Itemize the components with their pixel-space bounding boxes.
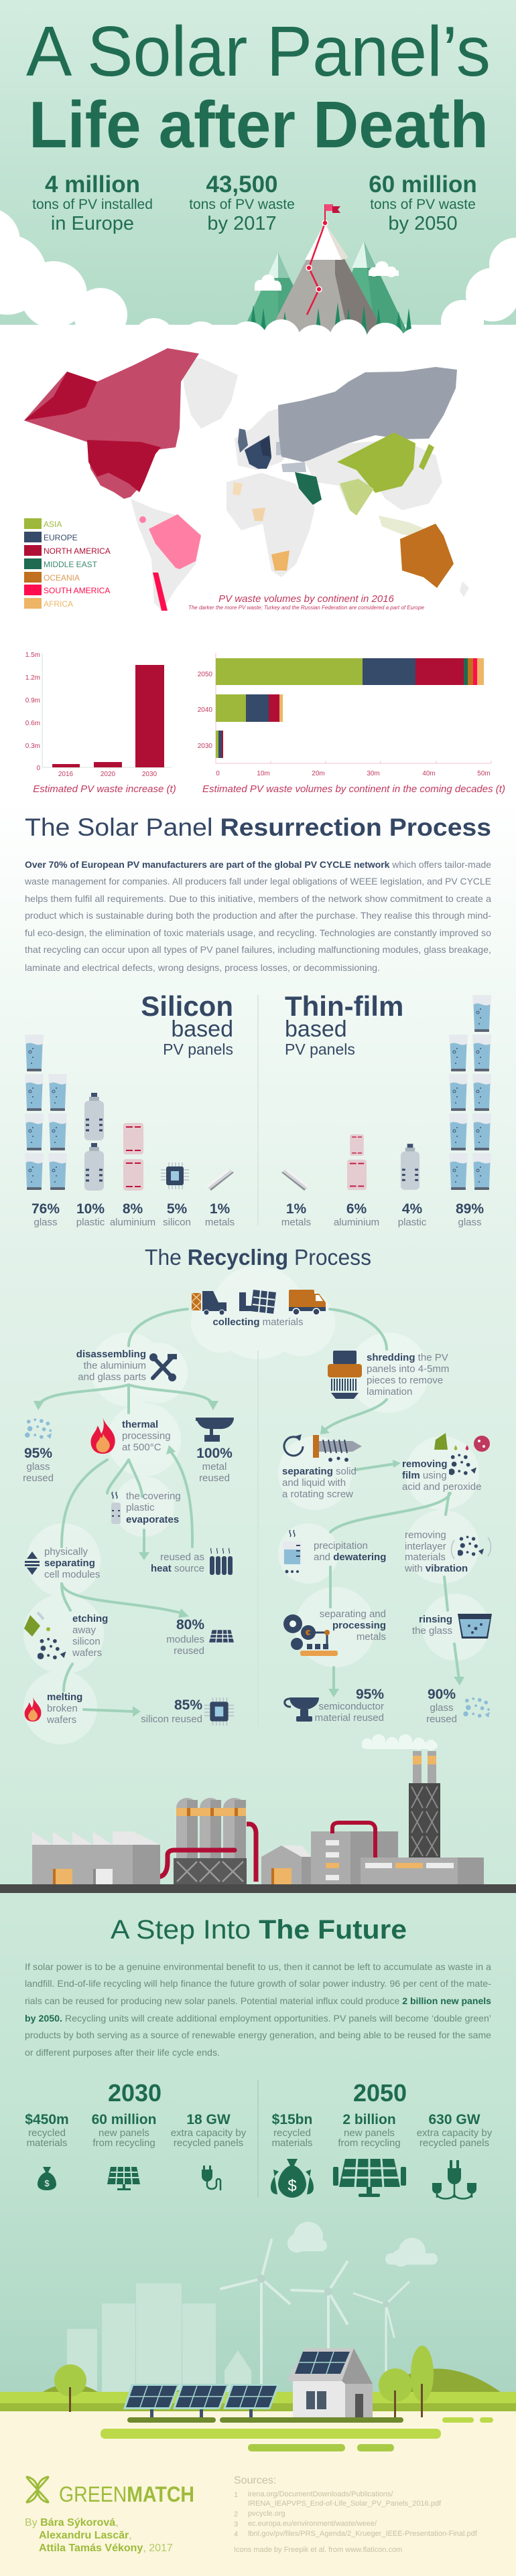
heading: silicon based PV panels: based	[171, 1016, 233, 1042]
future stats 2030	[25, 2112, 247, 2149]
material percentages: 1%	[286, 1201, 306, 1217]
icons 2050	[271, 2159, 476, 2199]
paragraph: PV CYCLE: helps them fulfil all requirements. Due to this initiative, members of the network show commitment to create a	[25, 893, 491, 904]
step: removing interlayer materials: with vibration	[404, 1563, 468, 1574]
step: separating solid and liquid: a rotating screw	[282, 1489, 353, 1500]
bar chart: estimated PV waste increase: 0.6m	[25, 720, 40, 727]
step: plastic evaporates: the covering	[126, 1491, 181, 1502]
bar chart: estimated PV waste increase	[25, 652, 176, 795]
future stats 2050: materials	[272, 2137, 312, 2149]
illustration: factory	[0, 1734, 516, 1893]
map caption	[188, 593, 425, 611]
silicon material icons	[25, 1035, 234, 1191]
paragraph: PV CYCLE: laminate and electrical defects, wrong designs, process losses, or decommissioning.	[25, 962, 380, 973]
future stats 2050: 630 GW	[428, 2112, 480, 2127]
result: 95% semiconductor material reused: material reused	[315, 1712, 384, 1724]
stacked bar chart: waste by continent: 0	[216, 770, 220, 777]
heading: resurrection process: The Solar Panel Resurrection Process	[25, 814, 491, 841]
step: physically separating	[25, 1546, 100, 1580]
heading: thin-film based PV panels: PV panels	[285, 1041, 355, 1058]
sources: 4	[234, 2530, 238, 2539]
stacked bar chart: waste by continent: 50m	[477, 770, 491, 777]
stat: 60 million: tons of PV waste	[370, 197, 476, 212]
future stats 2030: recycled panels	[174, 2137, 243, 2149]
stacked bar chart: waste by continent: 10m	[257, 770, 270, 777]
result: 80% modules reused: 80%	[176, 1617, 204, 1633]
result: 100% metal reused: 100%	[196, 1446, 233, 1461]
material percentages: metals	[281, 1217, 311, 1228]
map legend	[24, 518, 111, 609]
stacked bar chart: waste by continent: Estimated PV waste volumes by continent in the coming decades (t)	[202, 783, 505, 795]
result: 95% glass reused	[23, 1418, 54, 1484]
step: collecting materials: collecting materials	[212, 1316, 304, 1328]
stat: 4 million: in Europe	[51, 213, 134, 234]
stat: 4 million: 4 million	[45, 171, 140, 198]
result: reused as heat source: heat source	[151, 1563, 204, 1574]
future stats 2050: recycled	[273, 2127, 311, 2139]
stat: 43,500: 43,500	[206, 171, 278, 198]
paragraph: PV CYCLE: ful eco-design, the elimination of toxic materials usage, and recycling. Technologies are constantly improved so	[25, 927, 491, 938]
result: 100% metal reused: metal	[202, 1461, 227, 1472]
result: 90% glass reused	[426, 1687, 490, 1725]
result: 90% glass reused: glass	[430, 1702, 454, 1714]
step: precipitation and dewatering: precipitation	[314, 1540, 368, 1551]
year 2050 heading: 2050	[353, 2079, 407, 2107]
future stats 2030: 18 GW	[186, 2112, 231, 2127]
step: plastic evaporates: evaporates	[126, 1514, 179, 1525]
authors: Attila Tamás Vékony, 2017	[39, 2543, 173, 2554]
step: separating and processing metals: separating and	[320, 1608, 386, 1620]
step: collecting materials	[192, 1290, 326, 1328]
map caption: PV waste volumes by continent in 2016	[218, 593, 395, 605]
material percentages: plastic	[398, 1217, 427, 1228]
authors: By Bára Sýkorová,	[25, 2517, 119, 2528]
step: melting broken wafers: melting	[47, 1691, 82, 1703]
bar chart: estimated PV waste increase: 1.5m	[25, 652, 40, 659]
map legend: NORTH AMERICA	[44, 546, 111, 556]
material percentages: plastic	[76, 1217, 105, 1228]
step: separating and processing metals	[283, 1608, 386, 1656]
material percentages: aluminium	[110, 1217, 155, 1228]
stacked bar chart: waste by continent: 2030	[198, 743, 212, 750]
bar chart: estimated PV waste increase: 1.2m	[25, 674, 40, 682]
stat: 60 million: 60 million	[369, 171, 477, 198]
heading: thin-film based PV panels	[285, 990, 403, 1058]
year 2030 heading: 2030	[108, 2079, 162, 2107]
paragraph: future: or different purposes after their life cycle ends.	[25, 2047, 220, 2058]
step: melting broken wafers	[25, 1691, 82, 1726]
step: physically separating: physically	[44, 1546, 88, 1558]
step: precipitation and dewatering	[283, 1530, 386, 1574]
sources: Sources:	[234, 2475, 276, 2486]
future stats 2030: new panels	[99, 2127, 149, 2139]
result: 90% glass reused: reused	[426, 1714, 457, 1725]
step: thermal processing: processing	[122, 1430, 171, 1442]
title: A Solar Panel’s	[26, 12, 491, 91]
map legend: SOUTH AMERICA	[44, 586, 110, 595]
result: 95% semiconductor material reused: 95%	[356, 1687, 384, 1702]
step: shredding: panels into 4-5mm	[367, 1363, 449, 1375]
heading: thin-film based PV panels: based	[285, 1016, 347, 1042]
process arrows and connectors	[39, 1309, 459, 1712]
bar chart: estimated PV waste increase: 2030	[142, 771, 157, 778]
stat: 60 million: by 2050	[388, 213, 458, 234]
paragraph: future: landfill. End-of-life recycling will help finance the future growth of solar power industry. 96 per cent of the mate-	[25, 1978, 491, 1989]
sources: 1	[234, 2491, 238, 2499]
result: 80% modules reused	[166, 1617, 234, 1657]
future stats 2030: $450m	[25, 2112, 69, 2127]
icons 2030	[38, 2166, 220, 2190]
sources: lbnl.gov/pv/files/PRS_Agenda/2_Krueger_IEEE-Presentation-Final.pdf	[248, 2530, 478, 2538]
result: 100% metal reused	[196, 1418, 234, 1484]
result: 95% semiconductor material reused	[285, 1687, 384, 1724]
result: reused as heat source: reused as	[160, 1551, 204, 1563]
world map	[24, 348, 469, 611]
future stats 2050	[272, 2112, 493, 2149]
step: removing interlayer materials: removing	[405, 1529, 446, 1541]
paragraph: future: products by both serving as a source of renewable energy generation, and being able to be reused for the same	[25, 2030, 491, 2040]
header background	[0, 0, 516, 343]
step: separating and processing metals: metals	[357, 1631, 386, 1643]
future stats 2050: recycled panels	[420, 2137, 489, 2149]
sources: ec.europa.eu/environment/waste/weee/	[248, 2520, 377, 2528]
future stats 2030: materials	[27, 2137, 67, 2149]
step: rinsing the glass: rinsing	[419, 1614, 452, 1625]
step: shredding: pieces to remove	[367, 1375, 443, 1386]
step: removing interlayer materials: interlayer	[405, 1541, 446, 1552]
material percentages: 6%	[346, 1201, 367, 1217]
sources	[234, 2475, 478, 2554]
step: plastic evaporates: plastic	[126, 1502, 155, 1513]
result: 95% glass reused: glass	[26, 1461, 50, 1472]
step: removing film	[402, 1433, 490, 1493]
future stats 2030: extra capacity by	[171, 2127, 247, 2139]
map legend: OCEANIA	[44, 573, 80, 583]
bar chart: estimated PV waste increase: 2016	[58, 771, 74, 778]
step: etching: away	[72, 1624, 96, 1636]
step: rinsing the glass: the glass	[412, 1625, 452, 1637]
material percentages	[31, 1201, 484, 1228]
sources: 3	[234, 2520, 238, 2528]
step: thermal processing: at 500°C	[122, 1442, 162, 1453]
bar chart: estimated PV waste increase: 2020	[101, 771, 116, 778]
future stats 2030: recycled	[28, 2127, 66, 2139]
future stats 2030: 60 million	[92, 2112, 156, 2127]
result: 80% modules reused: reused	[174, 1645, 204, 1657]
sources: Icons made by Freepik et al. from www.flaticon.com	[234, 2546, 402, 2554]
stacked bar chart: waste by continent	[198, 653, 505, 795]
heading: the recycling process: The Recycling Process	[145, 1245, 371, 1270]
step: physically separating: separating	[44, 1558, 95, 1569]
sources: pvcycle.org	[248, 2510, 285, 2518]
logo: greenmatch: GREENMATCH	[59, 2482, 194, 2506]
step: separating solid and liquid: and liquid with	[282, 1477, 346, 1489]
step: disassembling: disassembling	[76, 1349, 146, 1360]
paragraph: future	[25, 1961, 491, 2058]
stat: 4 million	[32, 171, 153, 234]
step: removing film: acid and peroxide	[402, 1481, 481, 1493]
material percentages: 89%	[456, 1201, 484, 1217]
material percentages: glass	[458, 1217, 482, 1228]
step: separating solid and liquid: separating solid	[282, 1466, 357, 1477]
stat: 43,500: tons of PV waste	[189, 197, 295, 212]
future stats 2050: 2 billion	[342, 2112, 396, 2127]
material percentages: silicon	[163, 1217, 191, 1228]
heading: thin-film based PV panels: Thin-film	[285, 990, 403, 1022]
material percentages: 4%	[402, 1201, 422, 1217]
result: 85% silicon reused: 85%	[174, 1697, 202, 1713]
stacked bar chart: waste by continent: 30m	[367, 770, 380, 777]
result: 95% glass reused: 95%	[24, 1446, 52, 1461]
material percentages: glass	[34, 1217, 58, 1228]
material percentages: aluminium	[334, 1217, 379, 1228]
material percentages: 8%	[123, 1201, 143, 1217]
step: removing interlayer materials	[404, 1529, 491, 1574]
material percentages: 10%	[76, 1201, 105, 1217]
future stats 2050: from recycling	[338, 2137, 401, 2149]
icons 2050: $	[287, 2177, 297, 2195]
step: separating solid and liquid	[282, 1434, 362, 1500]
result: reused as heat source	[151, 1548, 233, 1575]
paragraph: PV CYCLE: waste management for companies. All producers fall under legal obligations of WEEE legislation, and PV CYCLE	[24, 876, 491, 887]
material percentages: 5%	[167, 1201, 187, 1217]
authors: Alexandru Lascăr,	[39, 2530, 132, 2541]
result: 85% silicon reused: silicon reused	[141, 1714, 202, 1725]
stat: 60 million	[369, 171, 477, 234]
map caption: The darker the more PV waste; Turkey and the Russian Federation are considered a part of Europe	[188, 605, 425, 611]
map legend: ASIA	[44, 520, 62, 529]
step: plastic evaporates	[111, 1491, 181, 1525]
stacked bar chart: waste by continent: 20m	[312, 770, 325, 777]
authors	[25, 2517, 173, 2554]
title: Life after Death	[29, 88, 489, 161]
step: etching: silicon	[72, 1636, 101, 1647]
bar chart: estimated PV waste increase: 0.9m	[25, 697, 40, 704]
paragraph: PV CYCLE	[24, 859, 491, 973]
map legend: EUROPE	[44, 533, 78, 542]
step: thermal processing	[91, 1418, 171, 1454]
paragraph: PV CYCLE: product which is sustainable during both the production and after the purchase. They realise this through mind-	[25, 910, 491, 921]
step: removing film: removing	[402, 1458, 448, 1470]
step: etching: etching	[72, 1613, 108, 1624]
step: shredding: shredding the PV	[367, 1352, 448, 1363]
logo: greenmatch	[27, 2477, 194, 2506]
stacked bar chart: waste by continent: 2040	[198, 706, 212, 714]
illustration: mountains with flag	[134, 204, 432, 365]
stat: 43,500: by 2017	[207, 213, 277, 234]
stat: 4 million: tons of PV installed	[32, 197, 153, 212]
background clouds for process	[23, 1266, 489, 1744]
future stats 2030: from recycling	[92, 2137, 155, 2149]
material percentages: 76%	[31, 1201, 60, 1217]
step: precipitation and dewatering: and dewatering	[314, 1551, 386, 1563]
material percentages: metals	[205, 1217, 235, 1228]
map legend: MIDDLE EAST	[44, 560, 98, 569]
material percentages: 1%	[210, 1201, 230, 1217]
stacked bar chart: waste by continent: 40m	[422, 770, 436, 777]
step: melting broken wafers: wafers	[46, 1714, 76, 1726]
step: thermal processing: thermal	[122, 1419, 158, 1430]
bar chart: estimated PV waste increase: 0.3m	[25, 743, 40, 750]
title	[26, 12, 491, 161]
sources: IRENA_IEAPVPS_End-of-Life_Solar_PV_Panels_2016.pdf	[248, 2500, 442, 2508]
step: disassembling	[76, 1349, 177, 1383]
future stats 2050: $15bn	[272, 2112, 312, 2127]
result: 90% glass reused: 90%	[428, 1687, 456, 1702]
future stats 2050: new panels	[344, 2127, 395, 2139]
step: separating and processing metals: processing	[332, 1620, 386, 1631]
step: melting broken wafers: broken	[47, 1703, 78, 1714]
step: disassembling: and glass parts	[78, 1371, 146, 1383]
sources: irena.org/DocumentDownloads/Publications/	[248, 2490, 393, 2498]
paragraph: PV CYCLE: Over 70% of European PV manufacturers are part of the global PV CYCLE network which offers tailor-made	[25, 859, 491, 870]
step: shredding	[328, 1351, 449, 1399]
result: 100% metal reused: reused	[199, 1472, 230, 1484]
illustration: landscape with solar panels and house	[0, 2346, 516, 2451]
step: removing interlayer materials: materials	[405, 1551, 446, 1563]
result: 95% glass reused: reused	[23, 1472, 54, 1484]
paragraph: PV CYCLE: that recycling can occur upon all types of PV panel failures, including malfunctioning modules, glass breakage,	[25, 944, 491, 955]
future stats 2050: extra capacity by	[417, 2127, 493, 2139]
step: shredding: lamination	[367, 1386, 412, 1397]
heading: silicon based PV panels: Silicon	[141, 990, 233, 1022]
icons 2030: $	[44, 2178, 50, 2188]
paragraph: future: If solar power is to be a genuine environmental benefit to us, then it cannot be left to accumulate as waste in a	[25, 1961, 491, 1972]
heading: silicon based PV panels	[141, 990, 233, 1058]
sources: 2	[234, 2510, 238, 2518]
result: 80% modules reused: modules	[166, 1634, 204, 1645]
step: disassembling: the aluminium	[84, 1360, 146, 1371]
step: rinsing the glass	[412, 1614, 492, 1639]
paragraph: future: rials can be reused for producing new solar panels. Potential material influx could produce 2 billion new panels	[25, 1995, 491, 2006]
step: etching	[24, 1612, 108, 1659]
heading: silicon based PV panels: PV panels	[163, 1041, 233, 1058]
step: physically separating: cell modules	[44, 1569, 100, 1580]
bar chart: estimated PV waste increase: Estimated PV waste increase (t)	[33, 783, 176, 795]
step: etching: wafers	[72, 1647, 102, 1659]
result: 85% silicon reused	[141, 1697, 234, 1726]
map legend: AFRICA	[44, 599, 73, 609]
stat: 43,500	[189, 171, 295, 234]
bar chart: estimated PV waste increase: 0	[36, 765, 40, 772]
step: removing film: film using	[402, 1470, 447, 1481]
thin-film material icons	[281, 995, 491, 1191]
heading: a step into the future: A Step Into The Future	[111, 1915, 407, 1945]
result: 95% semiconductor material reused: semiconductor	[318, 1701, 384, 1712]
illustration: city with wind turbines	[67, 2222, 438, 2411]
stacked bar chart: waste by continent: 2050	[198, 671, 212, 678]
paragraph: future: by 2050. Recycling units will create additional employment opportunities. PV panels will become ‘double green’	[25, 2013, 491, 2024]
